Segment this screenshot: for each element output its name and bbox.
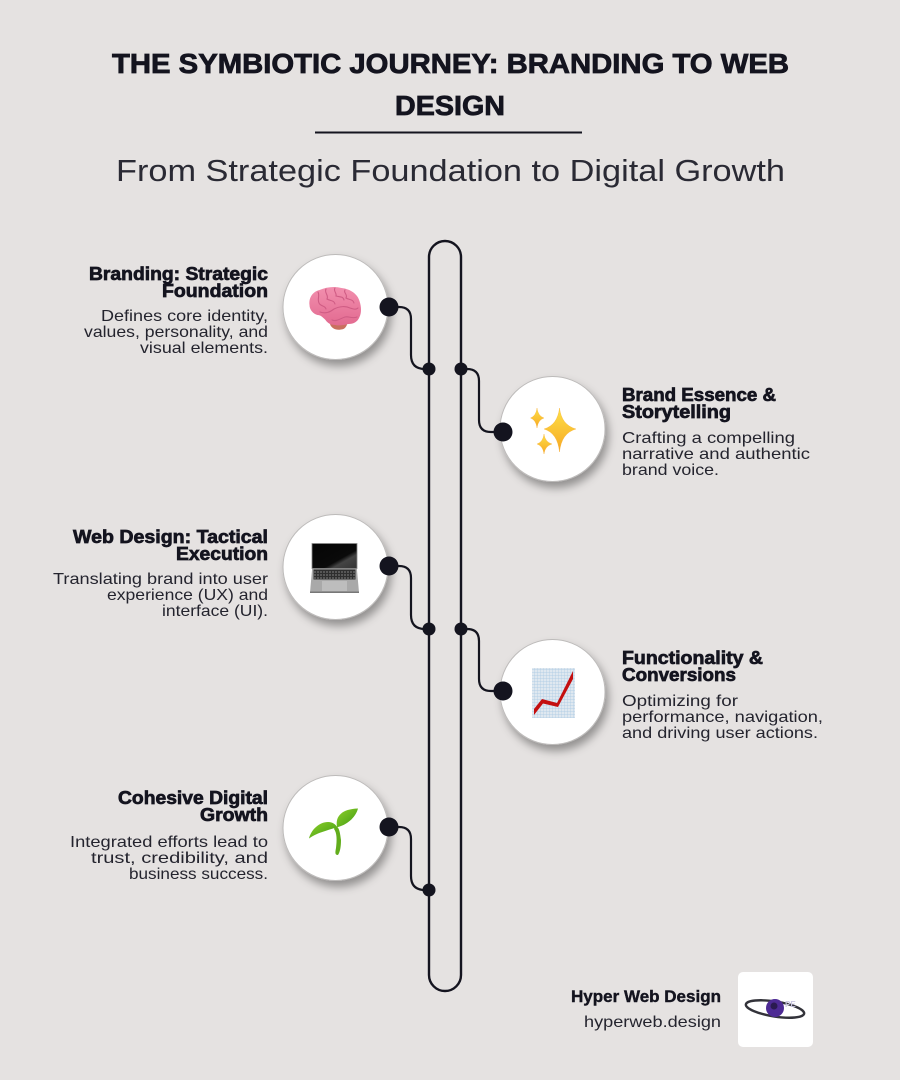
footer: logo (738, 972, 813, 1047)
node: functionality (494, 682, 512, 700)
text: web design: Translating brand into user (53, 571, 269, 588)
title underline (315, 132, 582, 134)
text: cohesive growth: Growth (200, 805, 268, 825)
step: branding (84, 254, 398, 360)
text: functionality: and driving user actions. (622, 725, 818, 742)
subtitle: From Strategic Foundation to Digital Growth (116, 153, 785, 188)
text: branding: values, personality, and (84, 324, 268, 341)
text: branding: Branding: Strategic (89, 264, 268, 284)
text: brand essence: Brand Essence & (622, 385, 776, 405)
icon: laptop (310, 544, 359, 593)
circle: cohesive growth (283, 776, 388, 880)
text: web design (53, 527, 269, 620)
circle: brand essence (500, 376, 605, 482)
footer: brand name: hyperweb.design (584, 1014, 721, 1031)
step: cohesive growth (70, 776, 398, 883)
icon: sparkles (530, 408, 576, 454)
text: web design: experience (UX) and (107, 587, 268, 604)
node: brand essence (494, 422, 512, 442)
icon: seedling (309, 808, 358, 855)
text: branding (84, 264, 268, 357)
text: functionality: Optimizing for (622, 693, 739, 710)
text: cohesive growth: business success. (129, 866, 268, 883)
timeline track (429, 241, 461, 991)
text: cohesive growth: trust, credibility, and (91, 850, 268, 867)
text: brand essence: brand voice. (622, 462, 719, 479)
node: cohesive growth (380, 818, 398, 836)
text: branding: Foundation (162, 281, 268, 301)
text: brand essence (622, 385, 810, 479)
text: branding: visual elements. (140, 340, 268, 357)
footer: brand name: Hyper Web Design (571, 988, 721, 1006)
text: brand essence: narrative and authentic (622, 446, 810, 463)
icon: chart (532, 668, 575, 718)
text: functionality (622, 648, 823, 742)
text: web design: Execution (176, 544, 268, 564)
text: brand essence: Crafting a compelling (622, 430, 795, 447)
text: web design: interface (UI). (162, 603, 268, 620)
node: branding (380, 298, 398, 316)
text: brand essence: Storytelling (622, 402, 731, 422)
node: web design (380, 556, 398, 576)
title (112, 48, 789, 121)
title: THE SYMBIOTIC JOURNEY: BRANDING TO WEB (112, 48, 789, 79)
text: functionality: Conversions (622, 665, 736, 685)
connectors (389, 307, 503, 890)
text: branding: Defines core identity, (101, 308, 268, 325)
footer: logo: PE (785, 1000, 796, 1009)
circle: functionality (500, 640, 605, 744)
step: functionality (494, 640, 823, 744)
text: cohesive growth: Integrated efforts lead to (70, 834, 268, 851)
text: cohesive growth (70, 788, 268, 883)
step: web design (53, 514, 398, 620)
text: web design: Web Design: Tactical (73, 527, 268, 547)
title: DESIGN (395, 90, 505, 121)
text: functionality: Functionality & (622, 648, 763, 668)
circle: web design (283, 514, 388, 620)
icon: brain (309, 287, 361, 330)
step: brand essence (494, 376, 810, 482)
text: functionality: performance, navigation, (622, 709, 823, 726)
track nodes (422, 362, 468, 896)
text: cohesive growth: Cohesive Digital (118, 788, 268, 808)
circle: branding (283, 254, 388, 360)
footer: brand name (571, 988, 721, 1031)
